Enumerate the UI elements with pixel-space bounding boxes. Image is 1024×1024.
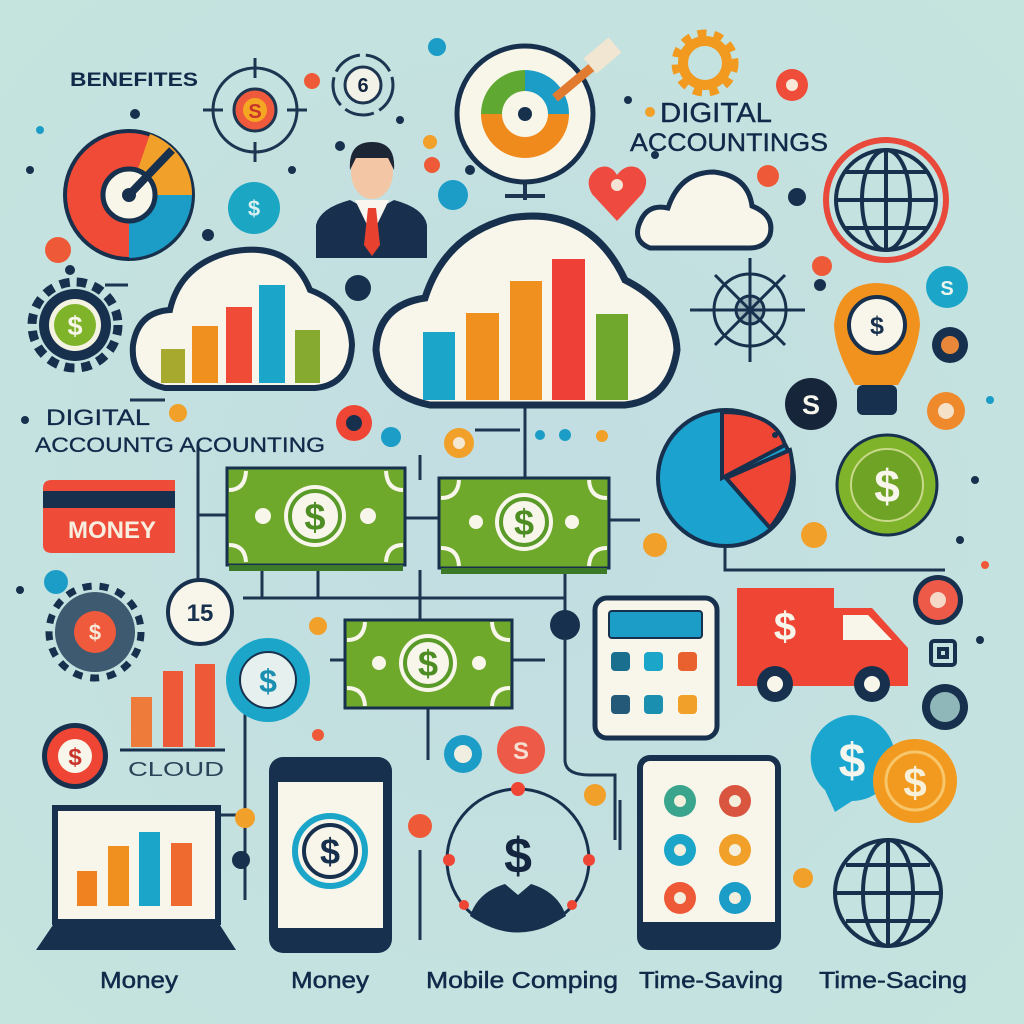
- icon: calculator: [595, 598, 717, 738]
- icon: compass network: [698, 258, 805, 362]
- banknote left: $: [304, 497, 326, 539]
- icon: orange ring: [927, 392, 965, 430]
- icon: ring pair center: [444, 726, 545, 774]
- footer labels: Time-Sacing: [819, 967, 967, 993]
- icon: businessman: [316, 142, 427, 258]
- icon: gauge chart: [65, 131, 193, 259]
- icon: dollar coin ring top: 6: [357, 75, 369, 97]
- icon: globe red ring: [826, 140, 946, 260]
- footer labels: Money: [291, 967, 370, 993]
- chart: main cloud bar chart: [376, 216, 677, 405]
- banknote lower: $: [418, 643, 438, 684]
- icon: accountant circle: $: [504, 828, 532, 884]
- heading: digital accounting left: [35, 405, 325, 457]
- icon: teal dollar bubble: [811, 715, 895, 812]
- footer labels: Mobile Comping: [426, 967, 618, 993]
- icon: orange ring center: [444, 428, 474, 458]
- banner: money: [43, 480, 175, 553]
- banknote lower: [345, 620, 512, 708]
- icon: globe bottom right: [835, 840, 941, 946]
- icon: dark ring: [932, 327, 968, 363]
- footer labels: Time-Saving: [639, 967, 783, 993]
- connector lines: [105, 285, 945, 940]
- icon: dark dollar circle: S: [802, 390, 820, 420]
- icon: red ring: [336, 405, 372, 441]
- heading: digital accountings: DIGITAL: [660, 97, 772, 128]
- icon: rings right: [913, 575, 963, 625]
- icon: teal pin dollar: [926, 266, 968, 308]
- icon: gear dollar: $: [89, 620, 101, 645]
- icon: heart: [589, 167, 646, 221]
- icon: orange small coins row: [169, 404, 827, 888]
- icon: square ring: [931, 641, 955, 665]
- icon: green dollar coin: $: [874, 460, 900, 512]
- icon: dollar coin ring top: [333, 55, 393, 115]
- heading: digital accountings: [630, 97, 828, 157]
- heading: digital accounting left: DIGITAL: [46, 405, 150, 430]
- icon: laptop: [36, 808, 236, 950]
- icon: dark teal ring: [922, 684, 968, 730]
- icon: small cloud: [638, 172, 771, 248]
- icon: red dollar circle: $: [68, 744, 82, 771]
- icon: green dollar coin: [837, 435, 937, 535]
- icon: teal dollar badge: $: [248, 196, 260, 221]
- icon: gear dollar left: [32, 282, 118, 368]
- icon: light bulb dollar: [834, 283, 920, 415]
- icon: phone: [269, 757, 392, 953]
- footer labels: Money: [100, 967, 179, 993]
- scatter dots: [16, 96, 984, 869]
- icon: teal dollar seal: [226, 638, 310, 722]
- chart: pie chart: [658, 410, 794, 546]
- chart: small bars cloud: [120, 664, 225, 781]
- icon: delivery truck: $: [774, 605, 796, 649]
- banknote left: [227, 468, 405, 571]
- icon: accountant circle: [443, 782, 595, 931]
- icon: dark dollar circle: [785, 378, 837, 430]
- icon: number badge: [168, 580, 232, 644]
- icon: tablet: [640, 758, 778, 947]
- icon: teal dollar bubble: $: [839, 735, 866, 788]
- icon: phone: $: [320, 831, 340, 872]
- icon: ring pair center: S: [513, 738, 529, 765]
- banner: money: MONEY: [68, 517, 156, 544]
- heading: digital accountings: ACCOUNTINGS: [630, 129, 828, 157]
- icon: target crosshair left: [203, 58, 307, 162]
- icon: gear orange: [675, 33, 735, 93]
- icon: light bulb dollar: $: [870, 312, 884, 340]
- banknote center: $: [514, 502, 534, 543]
- icon: gear dollar left: $: [67, 311, 83, 341]
- icon: teal dollar seal: $: [259, 663, 277, 699]
- icon: teal dollar badge: [228, 182, 280, 234]
- heading: benefites: BENEFITES: [70, 70, 198, 91]
- icon: gear dollar: [49, 586, 141, 678]
- icon: large donut target top: [457, 45, 615, 200]
- icon: red dollar circle: [42, 723, 108, 789]
- icon: number badge: 15: [187, 600, 213, 627]
- icon: orange coin: [873, 739, 957, 823]
- banknote center: [439, 478, 609, 574]
- icon: teal pin dollar: S: [940, 278, 954, 300]
- heading: digital accounting left: ACCOUNTG ACOUNTING: [35, 434, 325, 457]
- chart: small bars cloud: CLOUD: [128, 759, 224, 781]
- footer labels: [100, 967, 967, 993]
- icon: delivery truck: [737, 588, 908, 702]
- icon: red pin top right: [776, 69, 808, 101]
- icon: orange coin: $: [903, 759, 927, 806]
- icon: target crosshair left: S: [248, 101, 262, 123]
- chart: left cloud bar chart: [133, 250, 352, 388]
